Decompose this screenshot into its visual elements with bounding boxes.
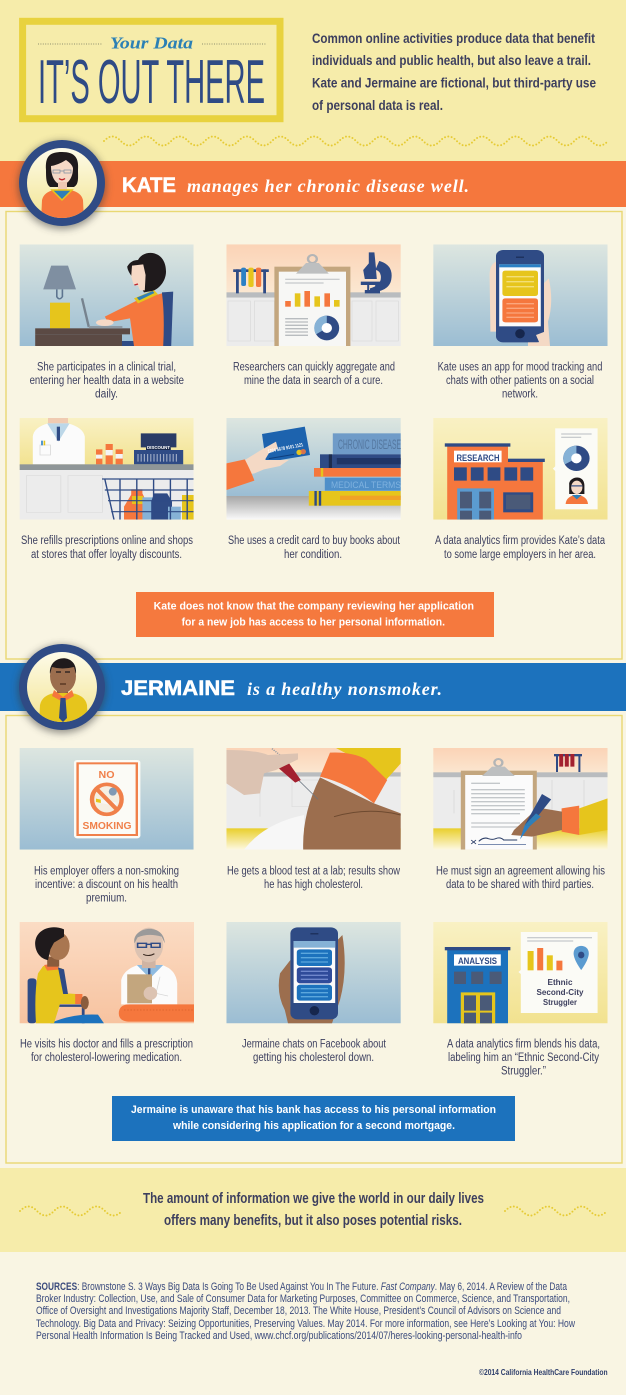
panel: jermaine (6, 716, 622, 1163)
caption: agreement (436, 866, 605, 891)
caption: data blend: labeling him an “Ethnic Second-City (448, 1052, 599, 1064)
illustration: doctor visit (20, 922, 194, 1023)
illustration: facebook chat (226, 922, 401, 1023)
intro text (312, 30, 596, 113)
row 4 illustrations (20, 922, 608, 1023)
jermaine banner (0, 663, 626, 711)
kate banner (0, 161, 626, 207)
caption: doctor visit (20, 1038, 193, 1064)
caption: researchers: mine the data in search of a cure. (244, 375, 383, 387)
portrait: jermaine (18, 644, 106, 733)
label: ethnic second-city struggler (536, 977, 584, 1007)
conclusion band (0, 1168, 626, 1252)
illustration: research firm (433, 418, 608, 520)
caption: data blend: Struggler.” (501, 1066, 546, 1078)
illustration: pharmacy and cart (20, 417, 194, 520)
title box (23, 21, 280, 119)
caption: prescriptions: She refills prescriptions online and shops (21, 535, 193, 547)
kate name: KATE (122, 174, 176, 197)
caption: data blend (447, 1038, 600, 1078)
caption: non-smoking: premium. (86, 892, 127, 904)
caption: blood test: He gets a blood test at a lab; results show (227, 866, 401, 878)
caption: facebook (242, 1038, 387, 1064)
callout: jermaine (112, 1096, 515, 1141)
sign text: smoking: SMOKING (82, 821, 132, 832)
sign text: no: NO (98, 770, 115, 781)
callout: jermaine: Jermaine is unaware that his bank has access to his personal information (131, 1104, 496, 1116)
caption: non-smoking: incentive: a discount on his health (35, 879, 178, 891)
label: ethnic second-city struggler: Ethnic (548, 977, 573, 987)
caption: mood app: chats with other patients on a social (446, 375, 594, 387)
illustration: blood test (226, 748, 401, 850)
row 1 illustrations (20, 244, 608, 346)
book title: medical terms: MEDICAL TERMS (331, 480, 401, 490)
caption: analytics firm: to some large employers in her area. (444, 549, 596, 561)
row 2 illustrations (20, 417, 608, 520)
label: ethnic second-city struggler: Second-City (536, 987, 584, 997)
illustration: credit card and books (226, 418, 401, 520)
caption: mood app: network. (502, 388, 538, 400)
card number: 1234 5678 9101 1121 (267, 442, 304, 455)
caption: facebook: getting his cholesterol down. (253, 1052, 374, 1064)
caption: facebook: Jermaine chats on Facebook about (242, 1038, 387, 1050)
caption: non-smoking: His employer offers a non-smoking (34, 866, 179, 878)
callout: kate (136, 592, 494, 637)
caption: mood app (438, 362, 602, 400)
book title: chronic disease: CHRONIC DISEASE (338, 437, 401, 452)
callout: jermaine: while considering his application for a second mortgage. (172, 1120, 455, 1132)
callout: kate: Kate does not know that the company reviewing her application (154, 600, 474, 612)
intro text: of personal data is real. (312, 97, 443, 113)
caption: doctor visit: for cholesterol-lowering medication. (31, 1052, 182, 1064)
row 3 illustrations (20, 748, 608, 850)
title: your data: Your Data (110, 34, 194, 52)
caption: credit card (228, 535, 401, 561)
sources: SOURCES: Brownstone S. 3 Ways Big Data Is Going To Be Used Against You In The Future. Fast Company. May 6, 2014. A Review of the Data (36, 1281, 568, 1293)
caption: researchers (233, 362, 395, 387)
illustration: clinical trial laptop (20, 244, 194, 346)
portrait: kate (18, 140, 106, 229)
sign: analysis: ANALYSIS (458, 956, 497, 967)
caption: prescriptions: at stores that offer loyalty discounts. (31, 549, 182, 561)
illustration: no smoking sign (20, 748, 194, 850)
caption: prescriptions (21, 535, 193, 561)
caption: researchers: Researchers can quickly aggregate and (233, 362, 395, 374)
caption: credit card: She uses a credit card to buy books about (228, 535, 401, 547)
sources (36, 1281, 575, 1342)
label: ethnic second-city struggler: Struggler (543, 997, 578, 1007)
callout: kate: for a new job has access to her personal information. (182, 616, 445, 628)
wavy dotted divider (104, 136, 608, 146)
header background (0, 0, 626, 161)
caption: clinical trial (30, 362, 184, 400)
conclusion band: The amount of information we give the world in our daily lives (143, 1191, 484, 1207)
caption: blood test: he has high cholesterol. (264, 879, 363, 891)
caption: clinical trial: daily. (95, 388, 118, 400)
caption: agreement: data to be shared with third parties. (446, 879, 594, 891)
caption: credit card: her condition. (284, 549, 342, 561)
caption: analytics firm (435, 535, 605, 561)
illustration: signing agreement (433, 748, 608, 850)
illustration: phone mood app (433, 244, 608, 346)
caption: clinical trial: She participates in a clinical trial, (37, 362, 176, 374)
sign: research: RESEARCH (456, 453, 500, 464)
caption: non-smoking (34, 866, 179, 904)
jermaine tagline: is a healthy nonsmoker. (247, 679, 442, 699)
jermaine name: JERMAINE (121, 677, 235, 700)
kate tagline: manages her chronic disease well. (187, 176, 469, 196)
conclusion band: offers many benefits, but it also poses potential risks. (164, 1213, 462, 1229)
discount sign: DISCOUNT (147, 445, 170, 450)
panel: kate (6, 212, 622, 659)
caption: blood test (227, 866, 401, 891)
title box: IT’S OUT THERE (38, 48, 265, 117)
caption: doctor visit: He visits his doctor and fills a prescription (20, 1038, 193, 1050)
illustration: researchers clipboard (226, 244, 401, 346)
illustration: analysis firm (433, 922, 608, 1023)
caption: clinical trial: entering her health data in a website (30, 375, 184, 387)
